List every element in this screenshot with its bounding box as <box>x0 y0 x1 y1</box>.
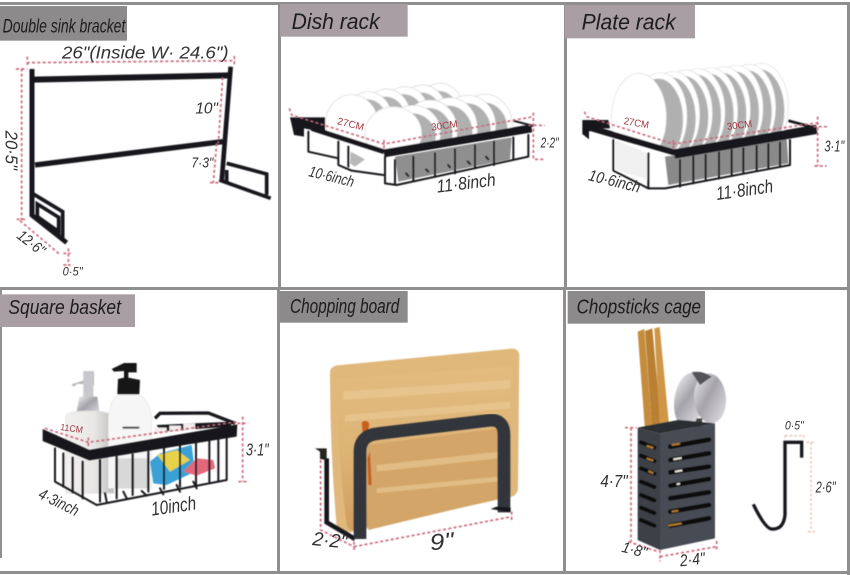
icon: spoons <box>671 371 728 429</box>
heading: square basket: Square basket <box>8 296 122 319</box>
depth label: 2·2" <box>310 529 349 554</box>
heading: chopping board <box>280 291 408 323</box>
icon: bracket frame <box>32 67 271 243</box>
white plates row <box>582 63 817 188</box>
27 cm label: 27CM <box>336 116 365 134</box>
icon: silver pump bottle <box>66 371 114 493</box>
width label: 26"(Inside W· 24.6") <box>61 43 229 63</box>
icon: black pump bottle <box>108 363 152 488</box>
width label: 11·8inch <box>715 175 774 204</box>
icon: wire basket with soap <box>43 413 237 505</box>
30 cm label: 30CM <box>726 119 753 133</box>
icon: perforated holder <box>638 420 715 550</box>
height label: 20·5" <box>1 130 21 171</box>
panel: plate rack <box>565 5 845 204</box>
depth label: 12·6" <box>14 227 49 260</box>
height label: 4·7" <box>600 471 629 491</box>
heading: double sink bracket: Double sink bracket <box>3 16 127 37</box>
heading: plate rack <box>565 5 695 38</box>
dimension lines <box>45 417 248 482</box>
width label: 11·8inch <box>435 170 497 197</box>
27 cm label: 27CM <box>623 116 650 131</box>
panel: dish rack <box>280 4 559 197</box>
height label: 2·2" <box>540 135 559 151</box>
heading: square basket <box>0 294 135 327</box>
dimension lines <box>584 112 828 166</box>
heading: chopsticks cage: Chopsticks cage <box>577 295 701 318</box>
panel: chopsticks cage <box>568 291 837 570</box>
icon: black metal holder <box>315 420 511 539</box>
panel: chopping board <box>280 291 519 555</box>
panel: square basket <box>0 294 270 521</box>
hook opening label: 0·5" <box>785 419 804 433</box>
height label: 3·1" <box>246 440 270 460</box>
dimension lines <box>289 108 545 160</box>
heading: dish rack <box>280 4 408 37</box>
heading: double sink bracket <box>0 6 127 41</box>
depth label: 10·6inch <box>307 163 356 191</box>
width label: 2·4" <box>678 549 707 570</box>
30 cm label: 30CM <box>431 119 458 134</box>
icon: bamboo boards <box>330 349 519 532</box>
11 cm label: 11CM <box>60 422 84 435</box>
heading: plate rack: Plate rack <box>582 10 677 35</box>
dimension lines <box>321 460 512 552</box>
width label: 9" <box>428 527 456 555</box>
heading: dish rack: Dish rack <box>292 9 381 34</box>
heading: chopsticks cage <box>568 291 705 324</box>
depth label: 10·6inch <box>587 167 642 197</box>
dimension lines <box>625 428 815 562</box>
width label: 10inch <box>150 494 198 521</box>
foot label: 0·5" <box>63 264 83 278</box>
icon: hook <box>753 442 802 529</box>
depth label: 1·8" <box>620 539 650 562</box>
icon: chopsticks <box>638 327 670 432</box>
panel: double sink bracket <box>0 6 271 278</box>
depth label: 4·3inch <box>36 486 81 520</box>
lower gap label: 7·3" <box>191 156 214 172</box>
dimension lines <box>16 56 235 266</box>
hook height label: 2·6" <box>815 479 837 496</box>
upper gap label: 10" <box>195 100 220 117</box>
plates in two rows <box>290 83 533 185</box>
heading: chopping board: Chopping board <box>290 296 400 318</box>
